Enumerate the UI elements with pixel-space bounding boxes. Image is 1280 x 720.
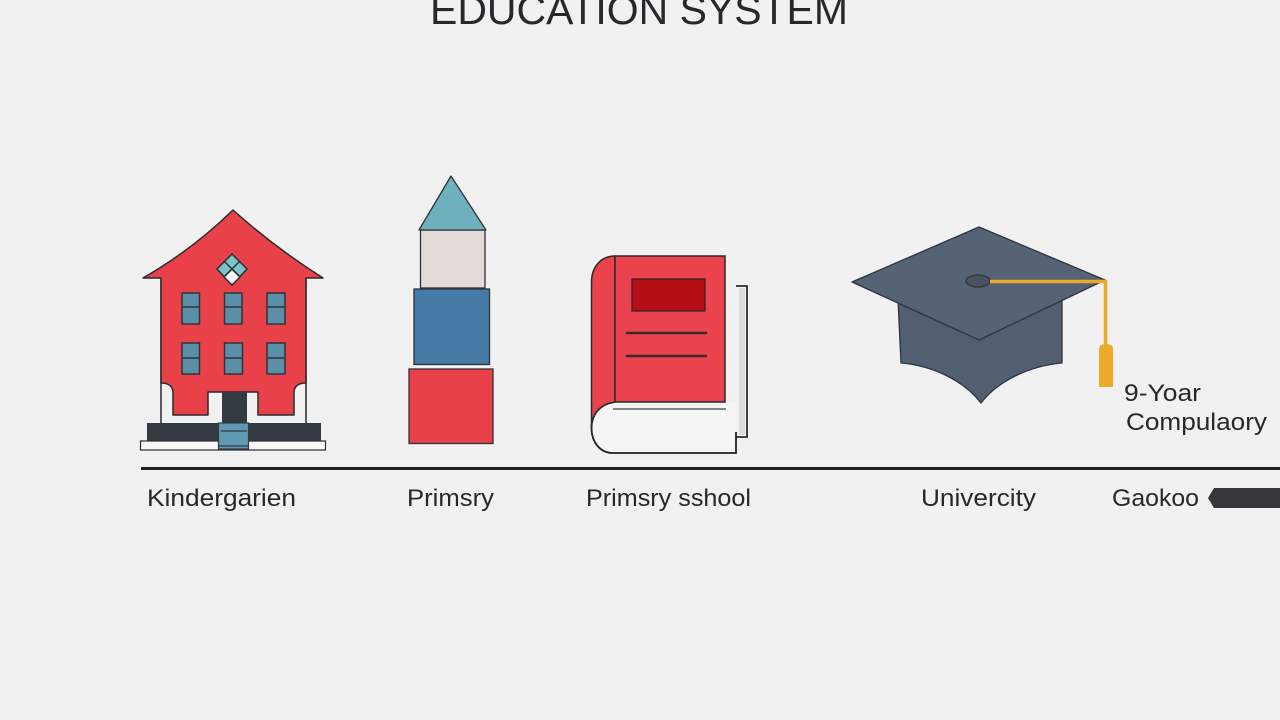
icon: graduation cap xyxy=(852,227,1113,403)
timeline axis xyxy=(141,467,1280,470)
stage labels: Primsry xyxy=(407,485,494,512)
stage labels: Gaokoo xyxy=(1112,485,1199,512)
windows xyxy=(182,293,285,374)
stage labels xyxy=(147,485,1199,512)
arrow: gaokoo pointer bar xyxy=(1208,488,1280,508)
icon: book xyxy=(592,256,747,453)
icon: kindergarten building xyxy=(140,210,326,450)
callout: 9-year compulsory: 9-Yoar xyxy=(1124,380,1201,407)
icon: stacked blocks xyxy=(409,176,493,444)
icon: roof diamond window xyxy=(217,254,247,285)
icon: tassel xyxy=(990,282,1113,387)
callout: 9-year compulsory: Compulaory xyxy=(1126,409,1267,436)
stage labels: Primsry sshool xyxy=(586,485,751,512)
stage labels: Kindergarien xyxy=(147,485,296,512)
stage labels: Univercity xyxy=(921,485,1036,512)
callout: 9-year compulsory xyxy=(1124,380,1267,436)
